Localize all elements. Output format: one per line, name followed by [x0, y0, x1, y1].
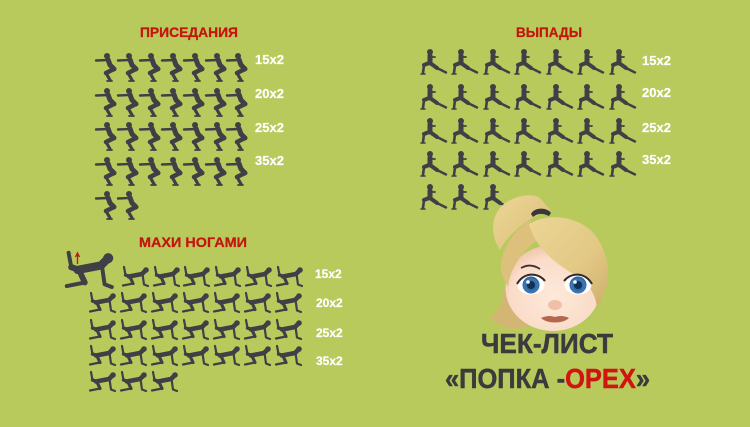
- leg swing rep counts: 35x2: [316, 354, 343, 368]
- leg swing rep counts: 20x2: [316, 296, 343, 310]
- title: check-list: ЧЕК-ЛИСТ: [481, 328, 613, 359]
- title: nut-shaped: «ПОПКА -ОРЕХ»: [445, 363, 650, 394]
- squat rep counts: [255, 52, 284, 168]
- squat rep counts: 35x2: [255, 153, 284, 168]
- squat rep counts: 15x2: [255, 52, 284, 67]
- leg swing rep counts: 15x2: [315, 267, 342, 281]
- squat rep counts: 20x2: [255, 86, 284, 101]
- icon: blonde woman emoji: [490, 195, 608, 331]
- panel: squat figures: [96, 53, 245, 219]
- lunge rep counts: 25x2: [642, 120, 671, 135]
- lunge rep counts: [642, 53, 671, 167]
- panel: leg swing figures: [90, 267, 303, 391]
- panel: lunge figures: [421, 49, 635, 209]
- icon: large leg swing figure with arrow: [67, 253, 113, 287]
- lunge rep counts: 15x2: [642, 53, 671, 68]
- heading: squats: ПРИСЕДАНИЯ: [140, 24, 238, 40]
- lunge rep counts: 35x2: [642, 152, 671, 167]
- heading: lunges: ВЫПАДЫ: [516, 24, 582, 40]
- lunge rep counts: 20x2: [642, 85, 671, 100]
- heading: leg swings: МАХИ НОГАМИ: [139, 234, 247, 250]
- leg swing rep counts: [315, 267, 343, 368]
- squat rep counts: 25x2: [255, 120, 284, 135]
- leg swing rep counts: 25x2: [316, 326, 343, 340]
